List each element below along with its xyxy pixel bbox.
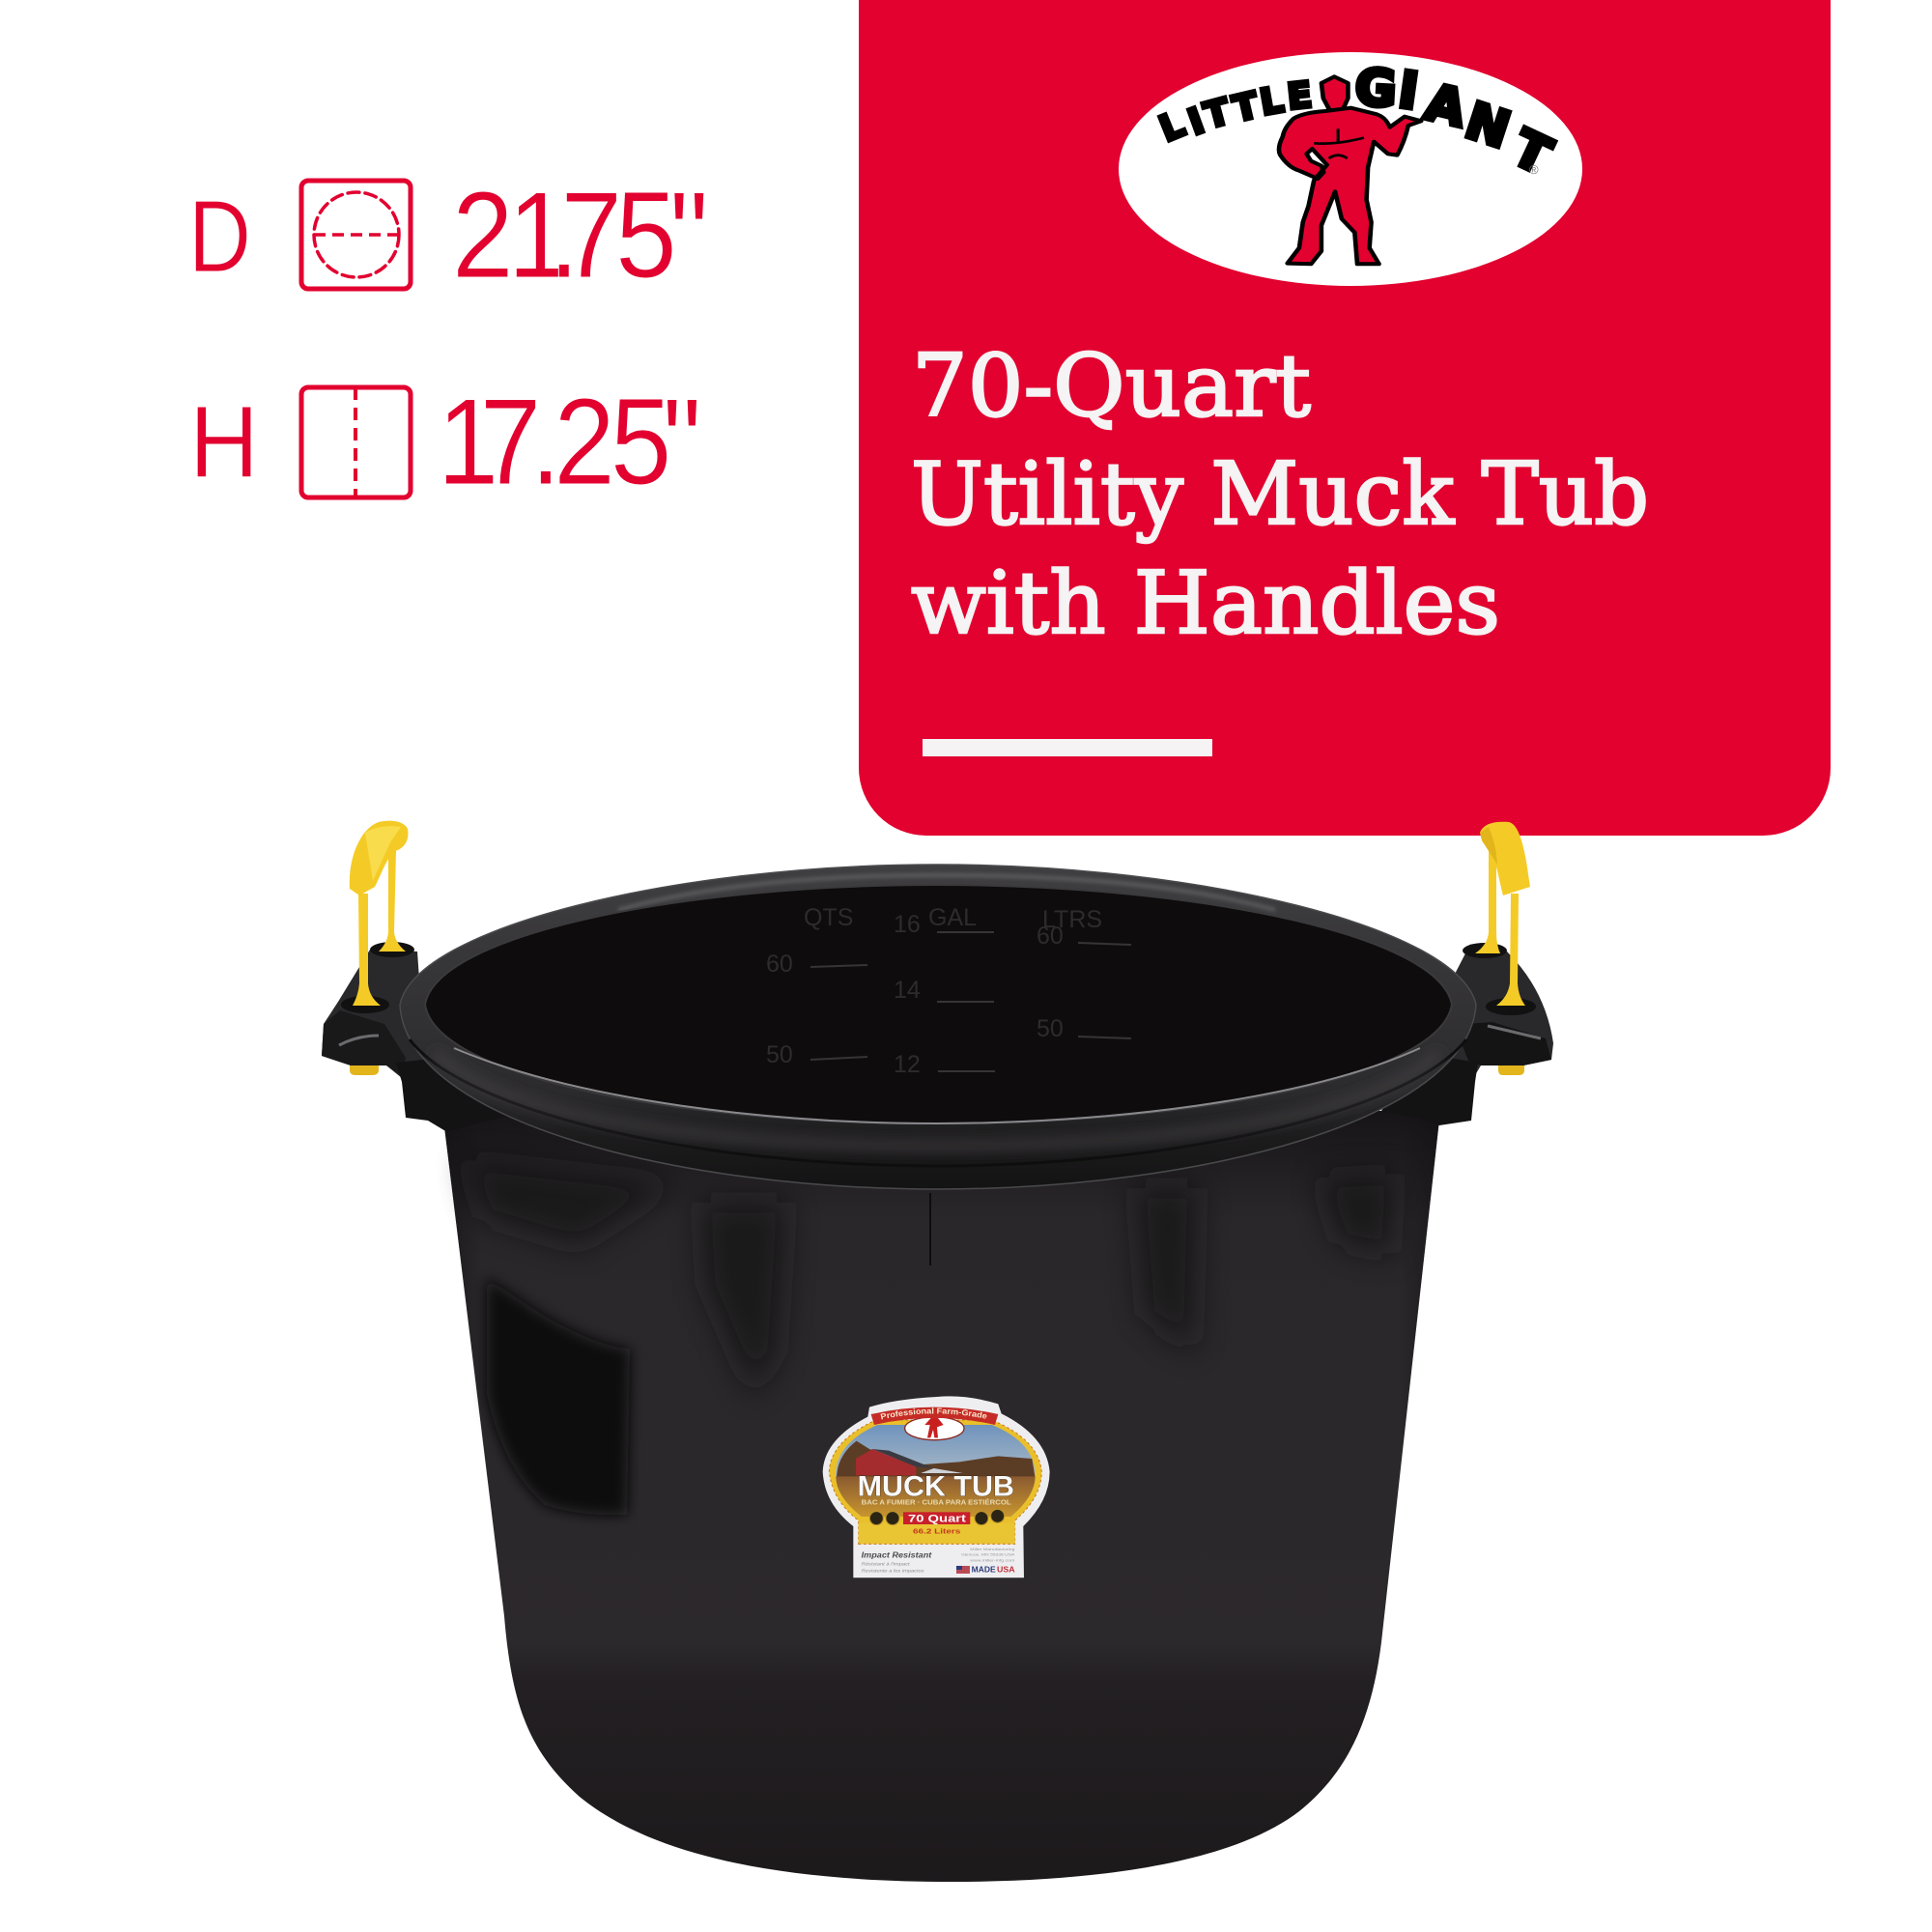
interior capacity markings: 60 xyxy=(766,951,793,978)
MUCK TUB: MUCK TUB xyxy=(858,1470,1014,1502)
label D: D xyxy=(188,180,251,294)
value 21.75: 21.75" xyxy=(452,166,709,303)
ribbon text: Professional Farm-Grade xyxy=(881,1407,987,1420)
interior capacity markings: 50 xyxy=(766,1041,793,1068)
interior capacity markings: GAL xyxy=(928,904,977,931)
icon: height xyxy=(301,387,411,497)
left yellow handle xyxy=(350,821,409,1075)
title xyxy=(911,335,1649,653)
mini logo xyxy=(905,1417,964,1440)
right yellow handle xyxy=(1475,822,1530,1075)
icon: diameter xyxy=(301,181,411,289)
gold border xyxy=(829,1420,1041,1544)
product label sticker: Résistant à l'impact xyxy=(862,1562,910,1568)
interior capacity markings: 60 xyxy=(1037,923,1064,950)
yellow lower banner xyxy=(859,1523,1015,1543)
value 17.25: 17.25" xyxy=(438,373,701,510)
interior capacity markings: 14 xyxy=(894,977,921,1004)
interior capacity markings xyxy=(766,904,1131,1078)
panel: red brand panel xyxy=(859,0,1831,836)
product label sticker: Resistente a los impactos xyxy=(862,1568,924,1574)
product label sticker xyxy=(823,1396,1050,1578)
sticker base xyxy=(823,1396,1050,1577)
logo: Little Giant xyxy=(1119,52,1582,286)
tub interior xyxy=(425,885,1452,1123)
product photo: muck tub xyxy=(322,821,1553,1882)
label H: H xyxy=(189,385,259,499)
interior capacity markings: QTS xyxy=(804,904,853,931)
tub rim xyxy=(400,865,1476,1189)
interior capacity markings: LTRS xyxy=(1042,906,1102,933)
top ribbon xyxy=(871,1407,998,1425)
product label sticker: MADE xyxy=(972,1565,996,1574)
logo wordmark: GIANT: GIANT xyxy=(1353,59,1559,186)
animal icons xyxy=(869,1509,1005,1525)
mold seam xyxy=(929,1193,931,1265)
title: with Handles xyxy=(911,553,1500,653)
dimension: height xyxy=(189,373,701,510)
dimension: diameter xyxy=(188,166,709,303)
accent bar xyxy=(923,739,1212,756)
red barn xyxy=(856,1449,916,1475)
interior capacity markings: 16 xyxy=(894,911,921,938)
title: 70-Quart xyxy=(912,335,1311,436)
product label sticker: www.miller-mfg.com xyxy=(970,1557,1015,1562)
litres: 66.2 Liters xyxy=(913,1527,960,1536)
title: Utility Muck Tub xyxy=(911,443,1649,544)
interior capacity markings: 50 xyxy=(1037,1015,1064,1042)
product label sticker: 70 Quart xyxy=(908,1514,966,1525)
right handle lug xyxy=(1381,943,1553,1125)
logo wordmark: LITTLE: LITTLE xyxy=(1153,74,1314,150)
reflection: upper streaks xyxy=(464,1159,1396,1396)
product label sticker: Glencoe, MN 55336 USA xyxy=(961,1552,1015,1557)
left handle lug xyxy=(322,942,507,1132)
translation line: BAC A FUMIER · CUBA PARA ESTIÉRCOL xyxy=(862,1497,1011,1506)
scene xyxy=(836,1425,1036,1517)
product label sticker: USA xyxy=(997,1565,1015,1574)
tub body xyxy=(442,1111,1440,1882)
logo: strongman figure xyxy=(1279,76,1421,264)
interior capacity markings: 12 xyxy=(894,1051,921,1078)
capacity badge xyxy=(903,1512,970,1524)
maker text: Miller Manufacturing xyxy=(970,1547,1014,1551)
made in USA xyxy=(956,1566,970,1574)
reflection: left dark patch xyxy=(487,1278,630,1515)
impact text: Impact Resistant xyxy=(862,1551,932,1560)
logo: registered mark: ® xyxy=(1529,162,1539,177)
